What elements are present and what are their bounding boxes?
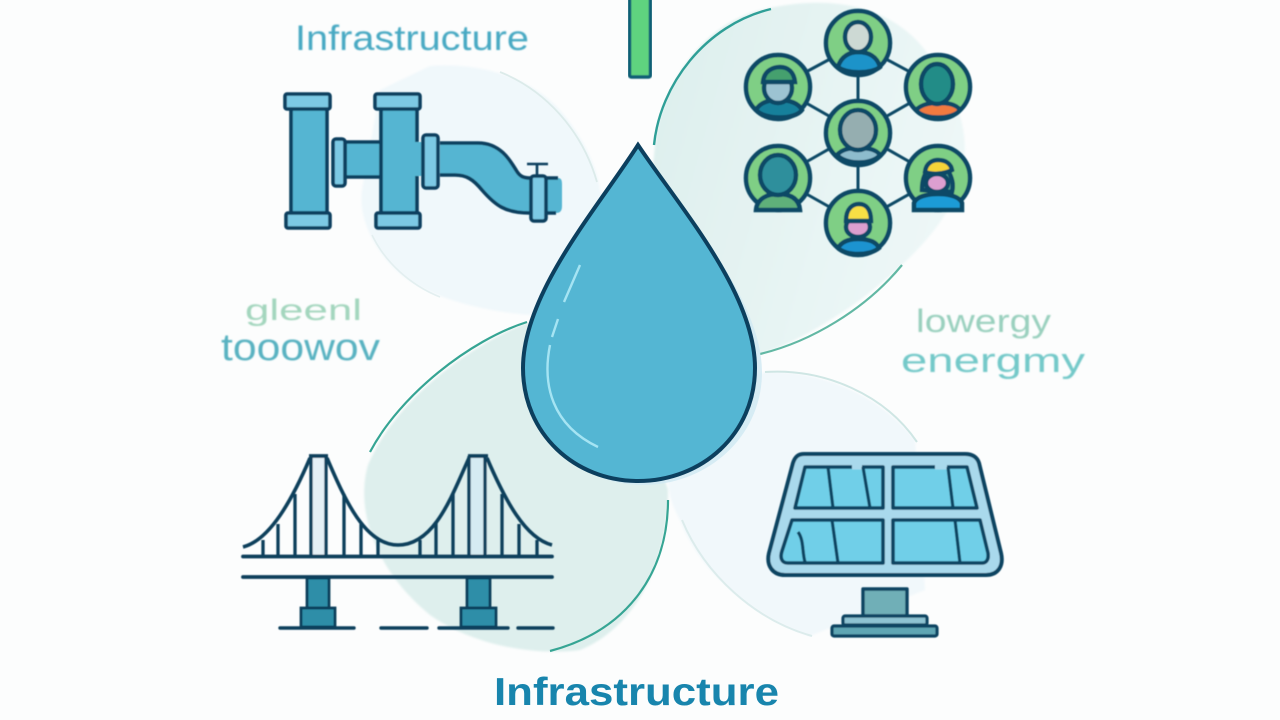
- person: top: [826, 11, 890, 75]
- text block: left label: tooowov: [221, 327, 380, 369]
- drop highlight: [548, 265, 598, 447]
- network links: [778, 44, 938, 223]
- text block: right label: lowergy: [916, 303, 1051, 339]
- text block: right label: energmy: [901, 342, 1085, 380]
- icon: green vertical bar: [630, 0, 650, 77]
- heading: bottom infrastructure title: Infrastructure: [494, 671, 779, 714]
- panel: background blob top left: [361, 65, 640, 315]
- text block: left label: [221, 294, 380, 369]
- heading: top infrastructure label: Infrastructure: [295, 19, 529, 58]
- person: bottom: [826, 191, 890, 255]
- person: upper left: [746, 55, 810, 119]
- panel: background blob top right: [640, 3, 965, 354]
- icon: solar panel: [768, 454, 1002, 636]
- text block: right label: [901, 303, 1085, 380]
- text block: left label: gleenl: [245, 294, 362, 327]
- icon: water pipe: [285, 94, 562, 228]
- bridge piers: [301, 578, 496, 627]
- panel: background blob bottom left: [364, 322, 668, 652]
- solar cells: [781, 467, 988, 563]
- person: lower left: [746, 146, 810, 210]
- person: upper right: [906, 55, 970, 119]
- person: centre: [826, 101, 890, 165]
- icon: water drop: [523, 145, 762, 485]
- icon: community network: [746, 11, 970, 255]
- panel: background blob bottom right: [668, 372, 925, 636]
- icon: suspension bridge: [243, 455, 553, 628]
- person: lower right: [906, 146, 970, 210]
